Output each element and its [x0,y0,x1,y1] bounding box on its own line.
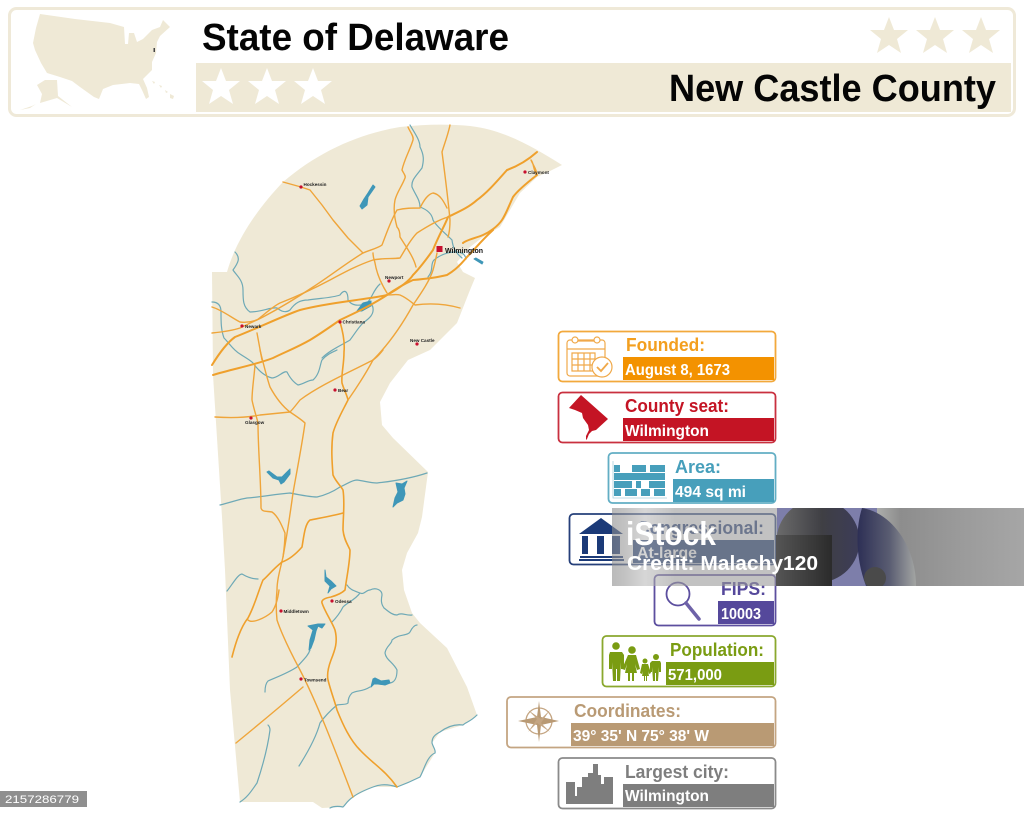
city: Middletown: Middletown [284,609,309,614]
city: Bear [333,388,348,393]
value: August 8, 1673 [625,362,730,379]
value: Wilmington [625,788,709,805]
panel: largest city [558,758,776,808]
rivers [212,125,477,808]
label: Area: [675,457,721,477]
label: Coordinates: [574,701,681,721]
stars: white [202,68,332,104]
city: Claymont: Claymont [528,170,549,175]
icon: area grid [613,461,667,498]
city: New Castle [410,338,435,346]
icon: US map [20,14,174,110]
icon: magnifier [666,582,699,619]
icon: family [609,642,661,681]
panel: population [602,636,776,686]
panel: FIPS [654,575,776,626]
city: Wilmington [436,246,483,255]
icon: capitol building [579,518,624,561]
lakes [267,185,483,687]
city: Townsend: Townsend [304,678,327,682]
title: State of Delaware [202,17,509,59]
watermark band [612,508,1024,586]
panel: founded [558,332,776,382]
label: County seat: [625,396,729,416]
icon: skyline [566,764,613,804]
county map [212,125,562,808]
watermark: credit: Credit: Malachy120 [627,553,818,575]
value: 10003 [721,606,761,623]
panel: congressional [570,514,776,564]
city: Hockessin: Hockessin [304,182,327,187]
city: Glasgow [245,416,265,425]
city: Odessa: Odessa [335,599,352,604]
watermark: iStock: iStock [626,515,717,552]
header ribbon [196,63,1011,112]
label: Population: [670,640,764,660]
county name: New Castle County [669,68,996,110]
city: Newport: Newport [385,275,404,280]
city: Hockessin [299,182,327,189]
header banner [10,8,1014,116]
land [212,125,562,808]
value: Wilmington [625,423,709,440]
value: 39° 35' N 75° 38' W [573,728,710,745]
city: Christiana: Christiana [342,320,365,324]
value: 494 sq mi [675,484,746,501]
label: FIPS: [721,579,766,599]
stars: beige [870,17,1000,53]
city: Bear: Bear [338,388,348,393]
icon: county shape [569,395,608,440]
city: Newport [385,275,404,283]
city: Wilmington: Wilmington [445,248,483,255]
image ID tag [0,791,87,807]
panel: coordinates [507,697,776,748]
image ID tag: 2157286779 [5,794,79,806]
value: 571,000 [668,667,722,684]
roads [212,125,537,797]
icon: compass rose [518,701,559,742]
value: At-large [637,545,697,562]
panel: county seat [558,392,776,442]
city: Newark: Newark [245,324,262,329]
panel: area [608,453,776,503]
city: Glasgow: Glasgow [245,420,265,425]
city: New Castle: New Castle [410,338,435,343]
icon: calendar [567,337,612,377]
label: Founded: [626,335,705,355]
label: Largest city: [625,762,729,782]
label: Congressional: [637,518,764,538]
